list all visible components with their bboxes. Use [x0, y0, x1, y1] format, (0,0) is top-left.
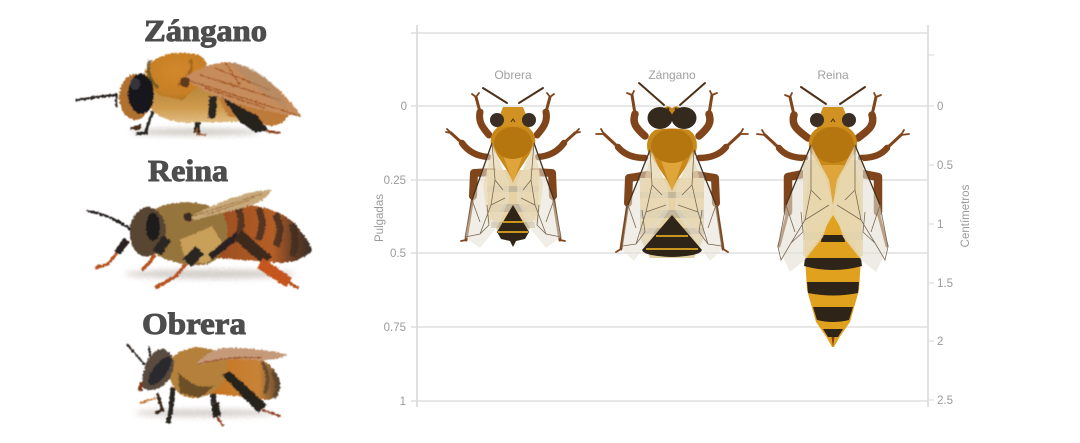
- chart: size comparison grid: [411, 25, 934, 407]
- illustration: drone bee: [596, 83, 748, 261]
- label: Obrera: Obrera: [494, 68, 532, 82]
- axis: Centímetros tick labels: [937, 101, 953, 407]
- axis: Centímetros tick labels: 0: [937, 101, 943, 113]
- photo: drone bee: [77, 53, 302, 136]
- axis: Pulgadas tick labels: 1: [400, 396, 406, 408]
- axis: Pulgadas tick labels: 0.5: [390, 248, 406, 260]
- axis title: Centímetros: Centímetros: [960, 184, 972, 247]
- illustration: worker bee: [446, 88, 580, 248]
- illustration: queen bee: [757, 87, 909, 347]
- axis: Centímetros tick labels: 0.5: [937, 160, 953, 172]
- title: Obrera: Obrera: [142, 306, 247, 341]
- axis: Pulgadas tick labels: 0.25: [384, 175, 406, 187]
- axis title: Pulgadas: Pulgadas: [374, 194, 386, 242]
- axis: Pulgadas tick labels: 0: [401, 101, 407, 113]
- axis: Pulgadas tick labels: 0.75: [384, 322, 406, 334]
- photo: queen bee: [88, 190, 311, 288]
- label: Reina: Reina: [817, 68, 849, 82]
- axis: Pulgadas tick labels: [384, 101, 407, 408]
- title: Reina: Reina: [148, 153, 229, 188]
- axis: Centímetros tick labels: 2.5: [937, 395, 953, 407]
- axis: Centímetros tick labels: 2: [937, 336, 943, 348]
- label: Zángano: Zángano: [648, 68, 696, 82]
- photo: worker bee: [127, 344, 288, 426]
- axis: Centímetros tick labels: 1: [937, 219, 943, 231]
- title: Zángano: Zángano: [144, 13, 267, 48]
- axis: Centímetros tick labels: 1.5: [937, 278, 953, 290]
